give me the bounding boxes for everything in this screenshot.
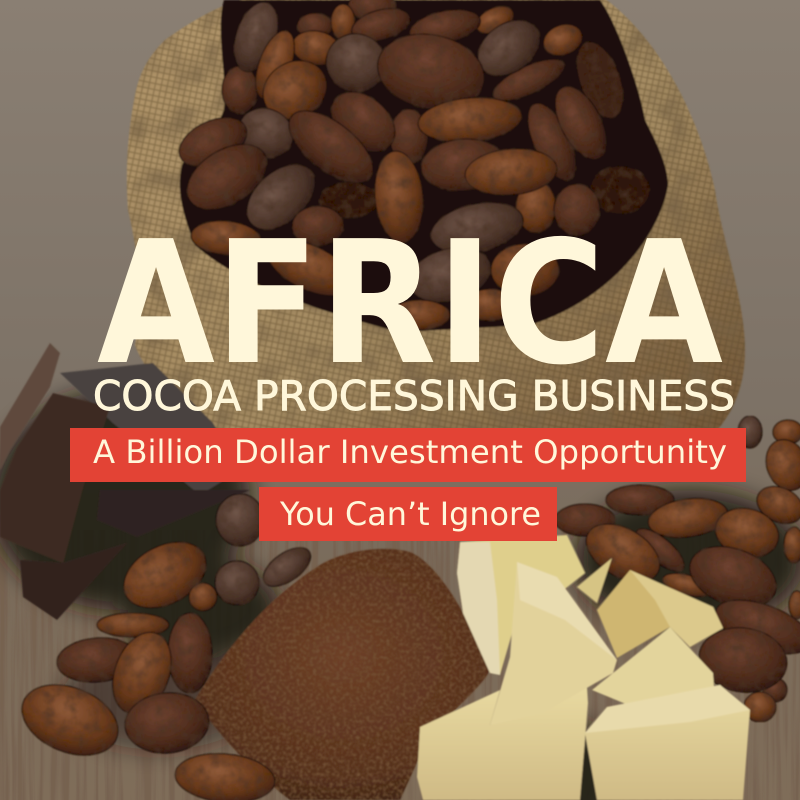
banner line 1 <box>70 428 746 482</box>
ground shadows <box>0 390 800 800</box>
loose beans, left side <box>12 613 277 800</box>
cocoa powder pile <box>195 549 490 800</box>
banner line 1: A Billion Dollar Investment Opportunity <box>93 433 727 471</box>
cocoa beans in the sack <box>171 0 650 330</box>
loose beans behind powder <box>113 494 317 693</box>
loose beans, right side <box>555 416 800 722</box>
burlap sack <box>127 0 745 480</box>
sack interior <box>180 0 668 332</box>
title: AFRICA: AFRICA <box>97 205 723 403</box>
cocoa butter chunks <box>417 535 750 800</box>
banner line 2 <box>259 487 557 541</box>
chocolate chunks <box>0 343 250 620</box>
banner line 2: You Can’t Ignore <box>279 495 541 533</box>
subtitle: COCOA PROCESSING BUSINESS <box>93 372 735 420</box>
